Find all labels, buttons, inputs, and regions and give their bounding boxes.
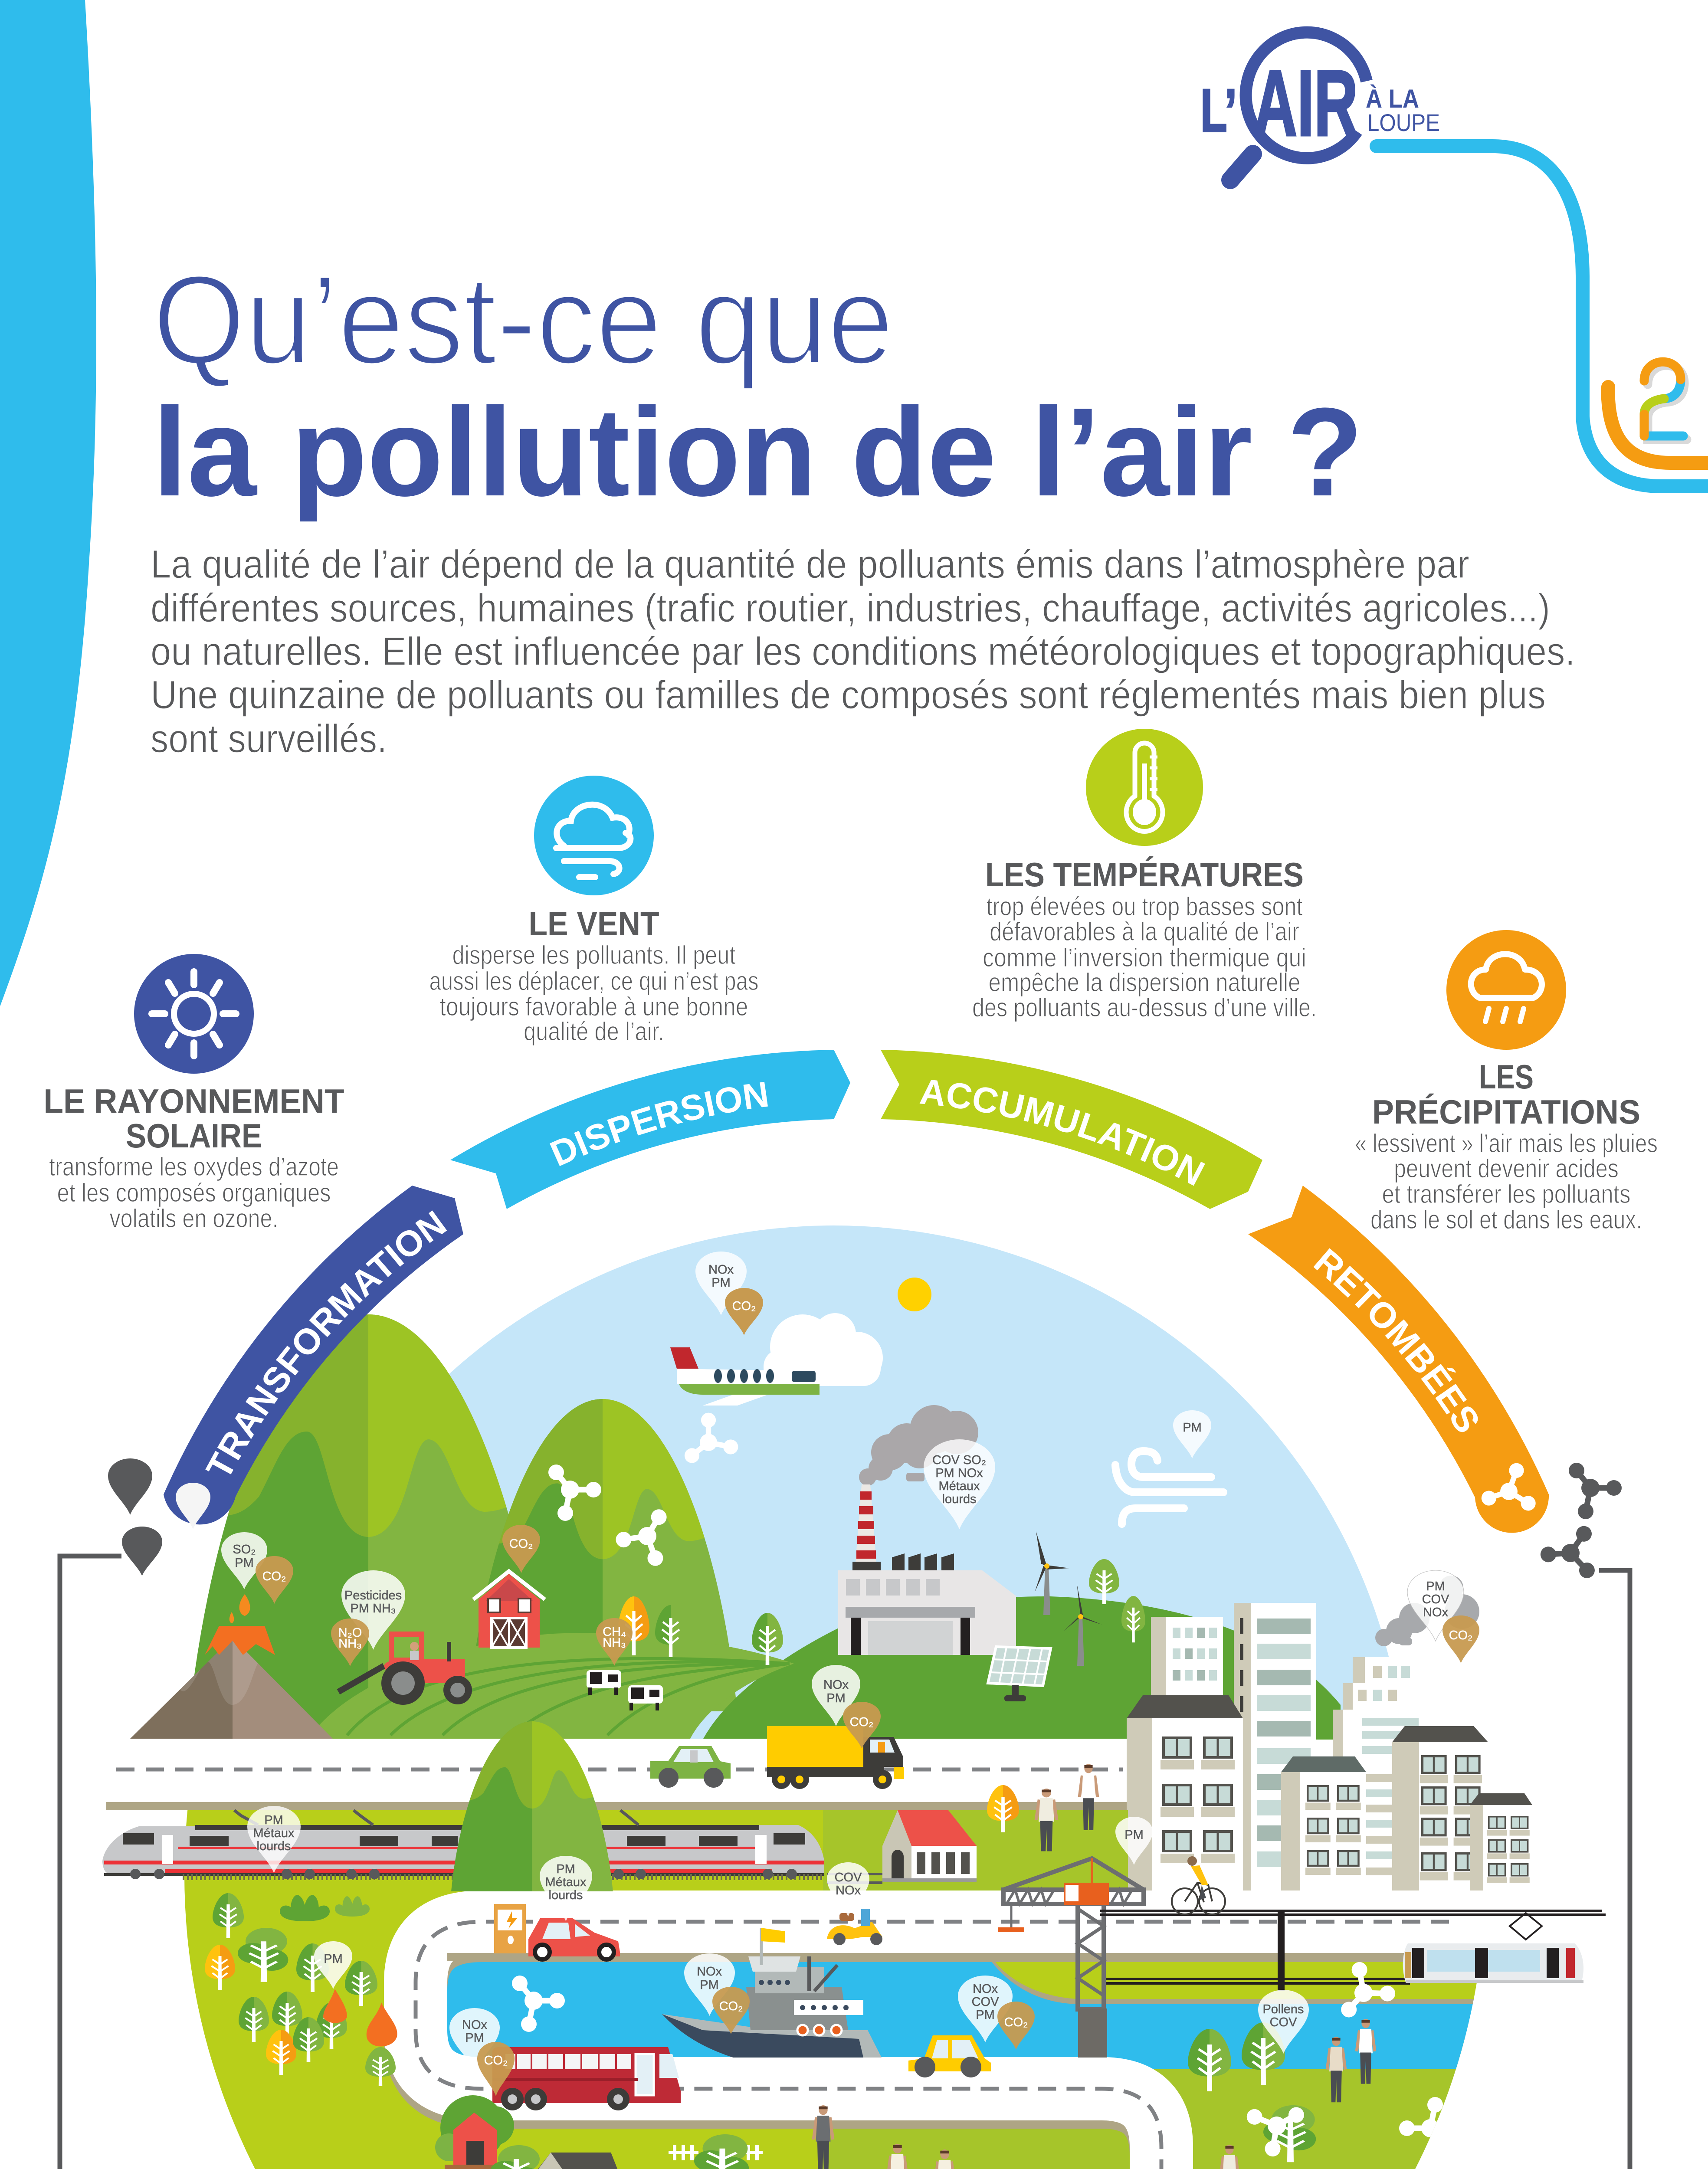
pin: ship: NOx [697,1965,722,1979]
intro paragraph: ou naturelles. Elle est influencée par les conditions météorologiques et topographiques. [151,629,1575,674]
pin: scooter: NOx [836,1884,861,1897]
pin: train: lourds [257,1839,291,1853]
pin: truck [812,1665,860,1726]
title [153,249,1363,523]
text: le rayonnement solaire: volatils en ozone. [109,1204,279,1233]
text: les températures: empêche la dispersion naturelle [988,968,1301,997]
pin: bus CO2: CO₂ [484,2054,508,2067]
text: les températures: comme l’inversion thermique qui [983,943,1306,972]
smoke: factory [859,1405,978,1486]
pin: yellow car [958,1976,1013,2042]
molecule: water [512,1976,565,2032]
woman 1 [1327,2037,1345,2102]
pin: wind: PM [1183,1421,1202,1435]
building: back [1151,1617,1223,1747]
pin: truck: PM [826,1691,846,1705]
man standing [813,2105,833,2169]
cloud [764,1313,883,1386]
pin: forest: PM [324,1952,343,1966]
pin: agriculture GHG: NH₃ [338,1637,362,1651]
green car [650,1746,731,1788]
pin: factory: lourds [942,1492,976,1506]
tree [345,1961,377,2006]
logo: L'air à la loupe: L’ [1200,76,1237,144]
tree right 2 [1242,2022,1285,2085]
yellow car [908,2035,991,2077]
pin: pollens [1258,1990,1309,2054]
pin: city: NOx [1423,1605,1448,1619]
pin: pollens: Pollens [1262,2002,1304,2016]
pin: cows: NH₃ [603,1636,626,1650]
pin: truck: NOx [823,1678,849,1692]
charging station [494,1904,526,1953]
bus [492,2047,681,2110]
pin: agriculture: PM NH₃ [350,1602,396,1615]
text: les températures: LES TEMPÉRATURES [985,855,1304,894]
dark molecule concentrations [1538,1513,1614,1589]
icon: wind [534,776,654,895]
connector: emissions [60,1556,183,2169]
building: far right white [1333,1657,1419,1892]
round tree by fence [694,2134,749,2169]
pin: red car: Métaux [545,1875,587,1889]
red house [882,1810,977,1882]
pin: red car: lourds [548,1888,583,1902]
title: la pollution de l’air ? [153,382,1363,523]
pin: plane CO2 [725,1288,763,1335]
pin: plane: NOx [708,1263,734,1277]
pin: yellow car: PM [976,2008,995,2022]
centre hill [451,1721,613,1891]
pin: bus CO2 [477,2042,515,2096]
pin: agriculture GHG: N₂O [338,1626,362,1640]
wind turbine 1 [1035,1531,1069,1615]
pin: volcano: PM [235,1556,254,1570]
tram [1403,1943,1583,1983]
old man [1220,2145,1239,2169]
pin: train: Métaux [253,1826,295,1840]
smoke: city [1375,1576,1479,1646]
intro paragraph [151,542,1575,761]
pin: volcano CO2 [256,1556,293,1604]
pin: factory [924,1439,995,1529]
icon: thermometer [1086,729,1203,846]
scooter [827,1909,882,1945]
dark pin top [108,1458,152,1515]
pin: volcano: SO₂ [233,1543,256,1556]
bush [280,1895,330,1921]
text: les précipitations [1355,1058,1658,1234]
banner: dispersion [450,1050,850,1209]
pin: construction: PM [1124,1828,1144,1842]
sun in sky [898,1278,931,1311]
text: les précipitations: PRÉCIPITATIONS [1372,1093,1640,1131]
text: le rayonnement solaire: transforme les oxydes d’azote [49,1152,339,1181]
blue line from logo [1377,146,1708,486]
pin: factory: PM NOx [935,1466,983,1480]
solar panel [988,1647,1051,1701]
woman 2 [1357,2019,1375,2084]
round tree by house [490,2145,541,2169]
dark molecule top [1569,1463,1622,1519]
right hill [703,1596,1341,1740]
pin: volcano [221,1532,267,1589]
pin: ship CO2: CO₂ [719,1999,743,2013]
road 2 [416,1922,1518,2169]
pin: cows: CH₄ [603,1625,626,1639]
cyclist [1172,1856,1225,1914]
pin: yellow car CO2 [997,2002,1035,2050]
pin on transformation banner [176,1483,210,1529]
round tree right [1263,2105,1316,2162]
title: Qu’est-ce que [153,249,894,391]
crane [998,1858,1144,2058]
tree house [435,2095,514,2169]
pin: ship: PM [700,1978,719,1992]
pin: scooter [827,1862,869,1917]
pin: red car [540,1856,592,1921]
pin: plane CO2: CO₂ [732,1299,756,1313]
building: tall [1234,1603,1316,1891]
intro paragraph: La qualité de l’air dépend de la quantité de polluants émis dans l’atmosphère par [151,542,1469,586]
pin: yellow car CO2: CO₂ [1004,2015,1028,2029]
pin: bus [449,2008,500,2071]
molecule: right 2 [1241,2099,1305,2161]
logo: L'air à la loupe: AIR [1253,51,1358,155]
text: le vent: disperse les polluants. Il peut [452,940,736,970]
tree light [365,2047,396,2086]
pin: agriculture [341,1570,405,1650]
tractor [338,1634,472,1705]
molecule on retombées banner [1479,1455,1547,1521]
tram wires [1100,1911,1606,1991]
pin: volcano CO2: CO₂ [262,1569,286,1583]
flame [367,2002,397,2047]
tan strip [106,1802,1127,1810]
text: les températures: des polluants au-dessus d’une ville. [972,993,1317,1022]
text: le vent [429,904,758,1046]
pollutant pins [221,1252,1479,2169]
banner: retombées: RETOMBÉES [1307,1241,1488,1440]
pin: yellow car: COV [972,1995,999,2009]
banner: retombées [1248,1186,1549,1533]
text: le rayonnement solaire: et les composés organiques [57,1178,331,1207]
pin: city CO2 [1442,1615,1479,1663]
field hill with furrows [308,1633,794,1740]
tree [213,1893,244,1938]
tree: hill 1 [1089,1559,1119,1604]
pin: factory: Métaux [938,1479,980,1493]
pin: truck CO2: CO₂ [850,1715,873,1729]
yellow tree [205,1945,235,1990]
building: small front [1281,1756,1366,1891]
tree [293,2017,324,2062]
pin: scooter: COV [835,1871,862,1884]
text: le vent: aussi les déplacer, ce qui n’est pas [429,967,758,996]
icon: rain [1446,930,1566,1050]
wind turbine 2 [1064,1583,1102,1666]
tree farm 2 [752,1613,783,1665]
bush light [335,1896,370,1917]
round tree [238,1928,288,1982]
pin: barn CO2: CO₂ [509,1537,533,1551]
pin: city [1407,1570,1464,1641]
pin: plane: PM [711,1276,731,1290]
barn [473,1571,545,1648]
fence [669,2145,763,2160]
tree: hill 2 [1121,1596,1145,1642]
cows [587,1670,663,1710]
molecule: mountain left [548,1465,601,1521]
building: stripes [1366,1774,1392,1875]
house 1 [524,2153,624,2169]
flame [323,1989,347,2023]
road 1 dashes [116,1767,1123,1772]
molecule: sky [685,1413,738,1463]
yellow tree [266,2030,296,2075]
text: les températures: trop élevées ou trop basses sont [987,892,1303,921]
molecule: mountain right [610,1507,682,1576]
pin: bus: NOx [462,2018,488,2032]
pin: plane [695,1252,747,1315]
text: les précipitations: dans le sol et dans les eaux. [1370,1205,1642,1234]
pin: train [247,1806,301,1873]
intro paragraph: sont surveillés. [151,717,387,761]
red car [528,1918,620,1962]
tan under road right [447,1953,1478,1961]
tree yellow farm [618,1596,649,1655]
road 2 dashes [416,1922,1449,2169]
text: le rayonnement solaire: SOLAIRE [126,1117,262,1155]
tree farm 1 [655,1605,686,1657]
connector: concentrations [1593,1570,1630,2169]
tree [316,2002,347,2049]
pin: yellow car: NOx [973,1982,998,1996]
text: les températures: défavorables à la qualité de l’air [990,917,1299,946]
factory [838,1484,1016,1655]
intro paragraph: différentes sources, humaines (trafic routier, industries, chauffage, activités agricoles...) [151,586,1550,630]
pin: bus: PM [465,2031,484,2045]
intro paragraph: Une quinzaine de polluants ou familles de composés sont réglementés mais bien plus [151,673,1546,717]
train [102,1810,824,1879]
pin: red car: PM [556,1862,575,1876]
tree: yellow by road [987,1785,1019,1832]
text: le vent: qualité de l’air. [524,1017,664,1046]
truck [767,1726,904,1789]
pin: train: PM [264,1813,283,1827]
walker 1 [888,2144,907,2169]
text: les températures [972,855,1317,1022]
pin: factory: COV SO₂ [932,1453,986,1467]
fence [827,1874,882,1883]
forest [205,1893,397,2086]
text: les précipitations: LES [1479,1058,1534,1096]
building: right [1392,1726,1488,1891]
pin: agriculture GHG [331,1619,369,1666]
pin: pollens: COV [1270,2015,1297,2029]
text: les précipitations: peuvent devenir acides [1394,1154,1619,1183]
pin: agriculture: Pesticides [344,1589,402,1602]
pin: city: COV [1422,1592,1449,1606]
wind symbol [1115,1451,1223,1524]
banner: transformation: TRANSFORMATION [198,1203,453,1485]
mountain medium [468,1399,737,1711]
text: le rayonnement solaire [43,1082,344,1233]
text: le vent: toujours favorable à une bonne [440,992,748,1021]
text: le vent: LE VENT [528,904,659,943]
text: le rayonnement solaire: LE RAYONNEMENT [43,1082,344,1120]
text: les précipitations: et transférer les polluants [1382,1180,1630,1209]
person: woman [1079,1764,1098,1830]
ground disc [184,1810,1483,2169]
pin: city CO2: CO₂ [1449,1628,1472,1642]
pin: ship [684,1953,735,2016]
left blue decorative shape [0,0,96,1006]
ship [662,1928,882,2058]
pin: city: PM [1426,1579,1445,1593]
water [447,1961,1514,2069]
walker 2 [935,2149,954,2169]
plane [670,1347,820,1406]
tree [272,1992,302,2037]
molecule: right 3 clipped [1399,2097,1452,2153]
road 2 shadow [384,1961,1403,2155]
logo: L'air à la loupe [1200,33,1440,180]
icon: sun [134,954,254,1074]
molecule: right 1 [1333,1957,1398,2018]
banner: accumulation [881,1050,1262,1209]
pin: construction [1115,1817,1153,1865]
sky disc [449,1225,1389,1739]
pin: barn CO2 [502,1525,540,1573]
buildings [1127,1603,1532,1892]
pin: truck CO2 [843,1702,881,1749]
building: far small [1470,1793,1532,1892]
pin: wind [1173,1410,1211,1458]
banner: dispersion: DISPERSION [544,1074,771,1174]
tree right 1 [1188,2029,1231,2091]
banner: accumulation: ACCUMULATION [918,1071,1211,1194]
person: backpack man [1036,1789,1056,1851]
pin: cows [596,1618,633,1666]
logo: L'air à la loupe: LOUPE [1367,109,1440,136]
pin: forest [314,1941,352,1989]
logo: L'air à la loupe: À LA [1366,84,1419,113]
dark pin emissions [122,1527,162,1576]
tree [239,1997,269,2042]
tree [296,1943,329,1992]
chapter number 2 [1644,362,1687,439]
road 2 extension [1301,1891,1588,1953]
orange line [1608,387,1708,463]
road 1 [0,1739,1127,1802]
building: front main [1127,1695,1243,1891]
pin: ship CO2 [712,1987,750,2034]
volcano [129,1594,334,1740]
mountain large [186,1314,551,1748]
